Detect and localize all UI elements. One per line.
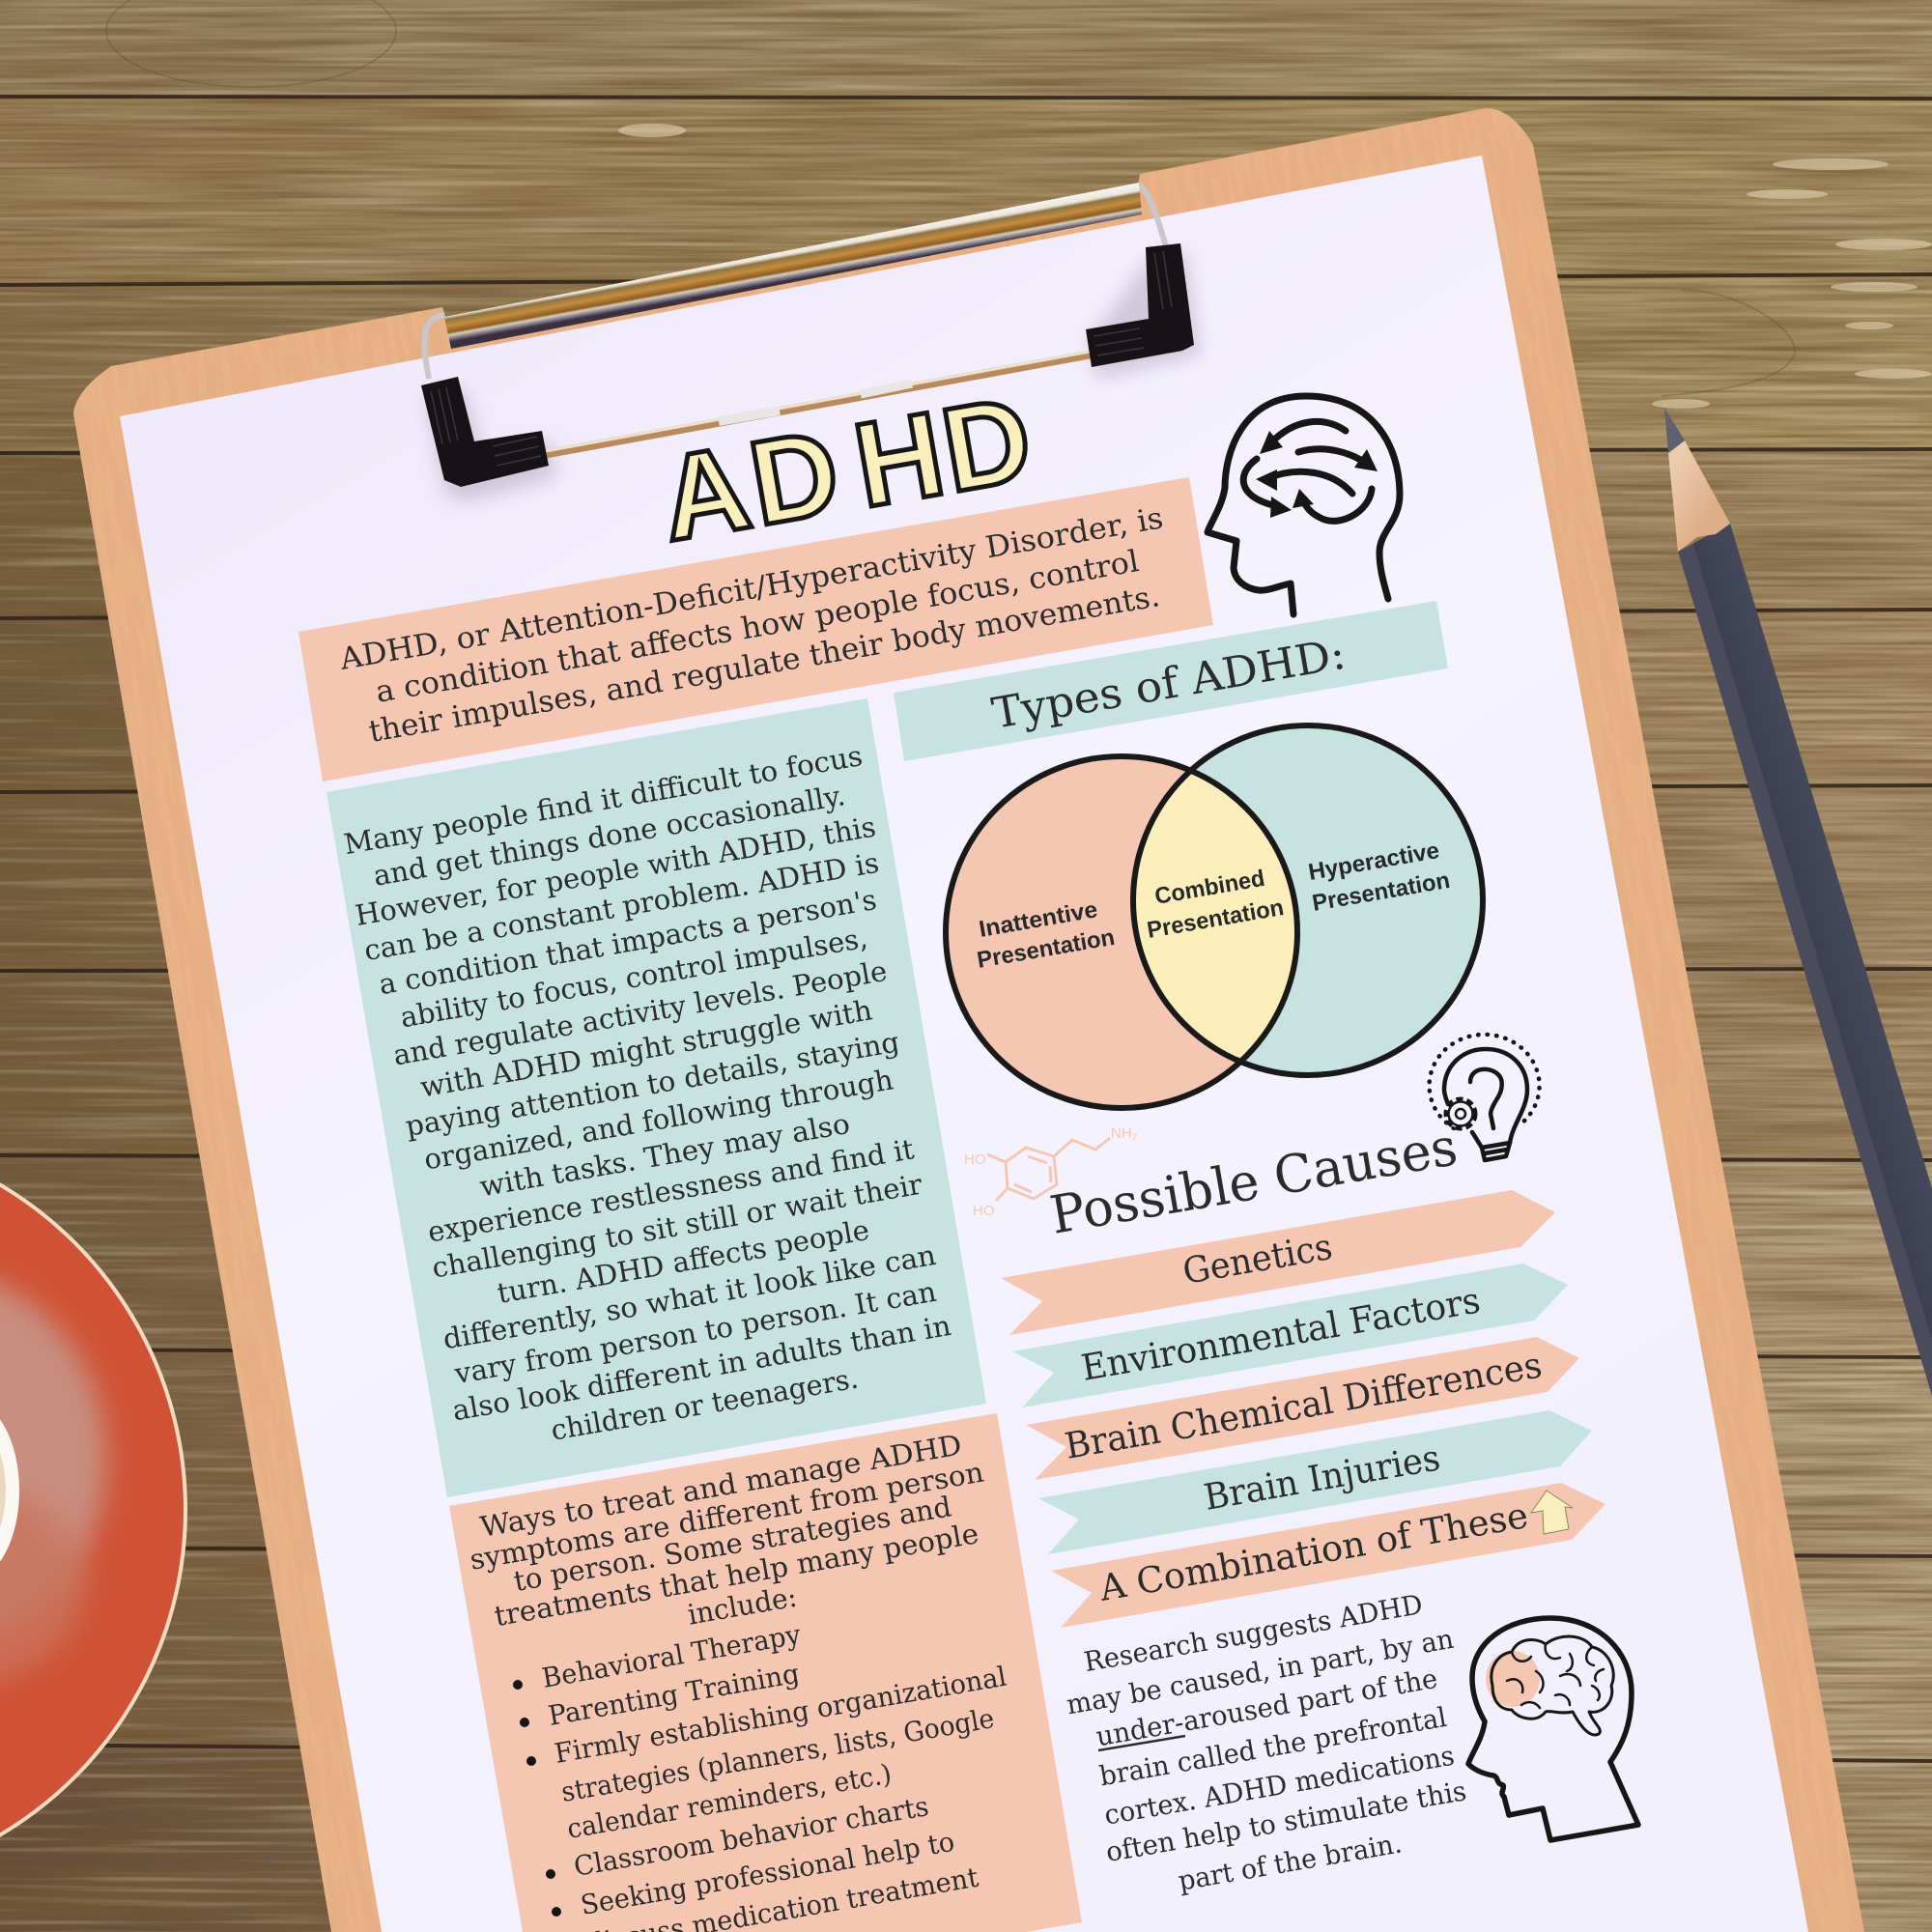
ribbon: genetics: Genetics bbox=[1179, 1226, 1335, 1293]
icon: dopamine molecule: HO bbox=[964, 1151, 985, 1168]
panel: what is ADHD description: and get things done occasionally. bbox=[371, 779, 847, 893]
panel: what is ADHD description: differently, so what it look like can bbox=[440, 1238, 938, 1355]
ribbon: brain injuries bbox=[1038, 1410, 1592, 1554]
text: research note: brain called the prefrontal bbox=[1097, 1701, 1449, 1792]
bullet list: Parenting Training bbox=[546, 1658, 802, 1732]
panel: treatment strategies: treatments that help many people bbox=[492, 1517, 980, 1633]
panel: what is ADHD description: can be a constant problem. ADHD is bbox=[361, 846, 881, 967]
panel: what is ADHD description: ability to focus, control impulses, bbox=[398, 921, 870, 1034]
panel: what is ADHD description: with ADHD might struggle with bbox=[417, 993, 874, 1104]
panel: what is ADHD description: children or teenagers. bbox=[549, 1361, 861, 1447]
panel: treatment strategies: include: bbox=[685, 1580, 799, 1632]
icon: dopamine molecule bbox=[964, 1125, 1138, 1219]
bullet list: Seeking professional help to bbox=[579, 1826, 956, 1921]
coffee saucer and cup bbox=[0, 1182, 187, 1837]
intro panel: their impulses, and regulate their body movements. bbox=[366, 579, 1162, 750]
clip shadow bbox=[425, 253, 1200, 502]
ribbon: brain injuries: Brain Injuries bbox=[1201, 1436, 1443, 1519]
heading: types of ADHD bbox=[894, 601, 1448, 761]
ribbon: genetics bbox=[1001, 1190, 1555, 1335]
metal clip bbox=[421, 183, 1194, 487]
bullet list: calendar reminders, etc.) bbox=[565, 1758, 894, 1845]
icon: head with swirling arrows bbox=[1208, 396, 1400, 614]
venn diagram: Inattentive bbox=[977, 896, 1099, 943]
bullet list: strategies (planners, lists, Google bbox=[559, 1702, 997, 1808]
panel: what is ADHD description: organized, and following through bbox=[421, 1063, 895, 1177]
intro panel: a condition that affects how people focus, control bbox=[373, 544, 1142, 710]
panel: what is ADHD description: with tasks. They may also bbox=[477, 1107, 852, 1203]
text: research note: Research suggests ADHD bbox=[1082, 1588, 1425, 1678]
text: research note: part of the brain. bbox=[1176, 1827, 1404, 1897]
panel: what is ADHD description: vary from person to person. It can bbox=[451, 1275, 939, 1390]
intro panel: ADHD, or Attention-Deficit/Hyperactivity Disorder, is bbox=[336, 500, 1166, 677]
venn diagram: Combined bbox=[1152, 866, 1266, 910]
panel: what is ADHD description: also look different in adults than in bbox=[450, 1309, 953, 1427]
pencil bbox=[1664, 408, 1932, 1396]
panel: what is ADHD description: challenging to sit still or wait their bbox=[430, 1168, 924, 1285]
venn diagram: Hyperactive bbox=[1306, 838, 1441, 886]
icon: lightbulb with question mark and gear bbox=[1430, 1035, 1540, 1160]
bullet list: Behavioral Therapy bbox=[540, 1618, 803, 1694]
panel: what is ADHD description: However, for people with ADHD, this bbox=[353, 810, 878, 932]
text: research note bbox=[1065, 1588, 1468, 1897]
heading: possible causes: Possible Causes bbox=[1045, 1116, 1462, 1246]
panel: treatment strategies bbox=[449, 1413, 1082, 1932]
text: research note: under-aroused part of the bbox=[1094, 1662, 1440, 1752]
icon: yellow arrow bbox=[1531, 1491, 1573, 1534]
bullet list: Firmly establishing organizational bbox=[553, 1661, 1009, 1770]
ribbon: environmental factors: Environmental Factors bbox=[1078, 1279, 1483, 1389]
venn diagram: Presentation bbox=[1310, 867, 1452, 917]
text: research note: cortex. ADHD medications bbox=[1102, 1740, 1457, 1832]
title: ADHD bbox=[651, 372, 1041, 567]
panel: what is ADHD description: and regulate activity levels. People bbox=[390, 954, 890, 1071]
ribbon: brain chemical differences: Brain Chemical Differences bbox=[1062, 1344, 1545, 1467]
panel: what is ADHD description: turn. ADHD affects people bbox=[495, 1213, 871, 1310]
panel: what is ADHD description: a condition that impacts a person's bbox=[377, 883, 879, 1001]
icon: head with brain bbox=[1468, 1618, 1638, 1840]
ribbon: a combination of these: A Combination of These bbox=[1095, 1494, 1531, 1609]
panel: what is ADHD description bbox=[327, 698, 986, 1497]
venn diagram: Presentation bbox=[975, 924, 1117, 974]
venn diagram bbox=[946, 725, 1483, 1108]
heading: types of ADHD: Types of ADHD: bbox=[988, 630, 1349, 739]
panel: treatment strategies: to person. Some strategies and bbox=[511, 1490, 953, 1598]
ribbon: a combination of these bbox=[1051, 1483, 1605, 1628]
panel: treatment strategies: symptoms are different from person bbox=[468, 1456, 986, 1577]
text: research note: often help to stimulate this bbox=[1103, 1775, 1468, 1868]
panel: what is ADHD description: Many people find it difficult to focus bbox=[341, 739, 865, 861]
venn diagram: Presentation bbox=[1145, 895, 1286, 944]
panel: treatment strategies: Ways to treat and manage ADHD bbox=[478, 1428, 964, 1544]
icon: dopamine molecule: NH₂ bbox=[1111, 1125, 1138, 1142]
icon: dopamine molecule: HO bbox=[973, 1203, 995, 1219]
text: research note: may be caused, in part, by an bbox=[1065, 1623, 1456, 1720]
intro panel bbox=[298, 477, 1213, 781]
bullet list bbox=[513, 1618, 1009, 1932]
panel: what is ADHD description: paying attention to details, staying bbox=[403, 1025, 901, 1143]
panel: what is ADHD description: experience restlessness and find it bbox=[425, 1132, 917, 1249]
bullet list: Classroom behavior charts bbox=[572, 1790, 931, 1883]
ribbon: environmental factors bbox=[1012, 1264, 1568, 1407]
